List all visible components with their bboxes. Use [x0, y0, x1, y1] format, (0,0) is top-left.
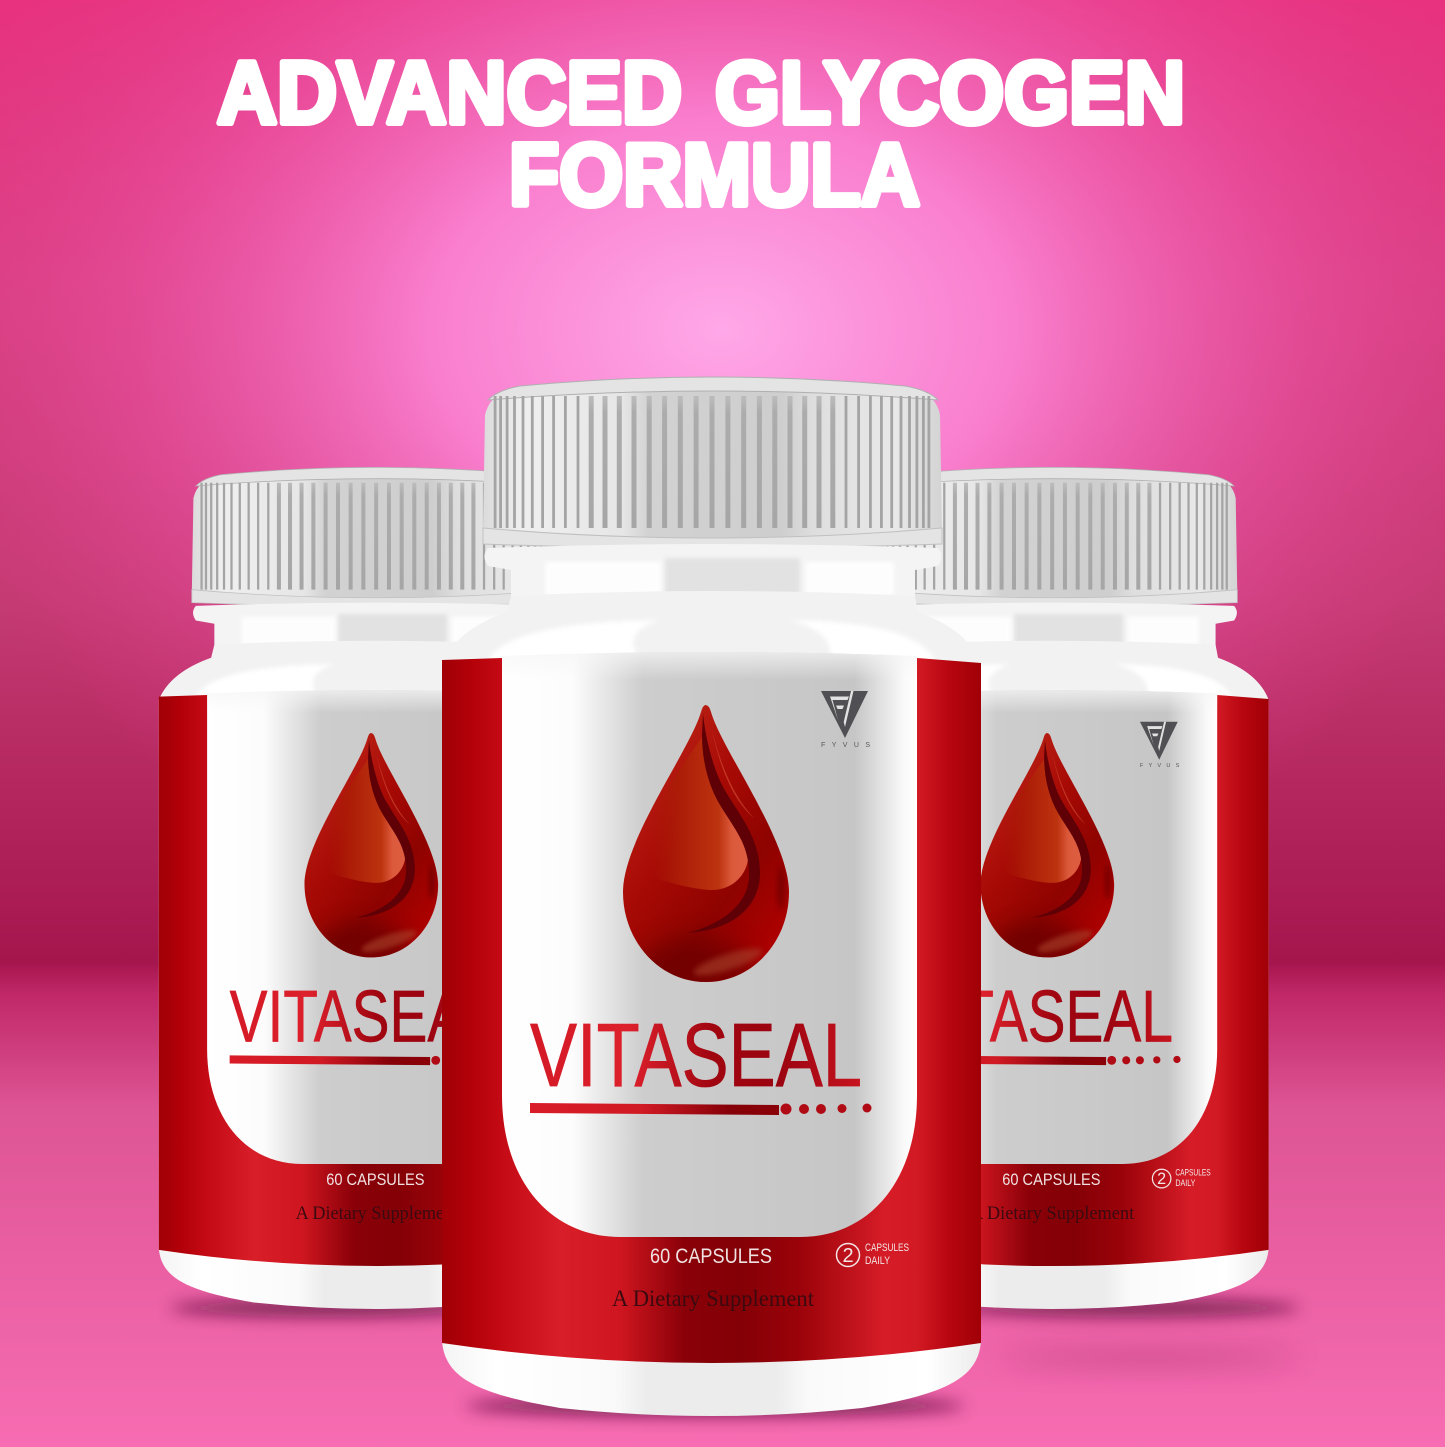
left bottle subtitle: A Dietary Supplement — [296, 1203, 459, 1224]
centre bottle — [442, 377, 981, 1416]
centre bottle capsule count: 60 CAPSULES — [650, 1245, 772, 1268]
centre bottle subtitle: A Dietary Supplement — [612, 1286, 815, 1311]
right bottle — [835, 467, 1269, 1309]
left bottle dose: 2 — [481, 1170, 490, 1188]
left bottle maker: FYVUS — [464, 763, 504, 769]
right bottle dose: DAILY — [1175, 1178, 1196, 1188]
title — [217, 43, 1185, 224]
centre bottle maker: FYVUS — [821, 742, 870, 749]
right bottle dose: CAPSULES — [1175, 1167, 1211, 1177]
centre bottle brand name: VITASEAL — [530, 1006, 862, 1106]
centre bottle dose: CAPSULES — [865, 1242, 909, 1254]
right bottle maker: FYVUS — [1140, 763, 1180, 769]
right bottle brand name: VITASEAL — [906, 976, 1173, 1058]
left bottle — [159, 467, 593, 1309]
background wall — [0, 0, 1445, 970]
left bottle capsule count: 60 CAPSULES — [326, 1170, 424, 1189]
title: ADVANCED — [217, 43, 682, 142]
right bottle dose: 2 — [1157, 1170, 1166, 1188]
title: GLYCOGEN — [715, 43, 1185, 142]
left bottle dose: DAILY — [499, 1178, 520, 1188]
title: FORMULA — [509, 125, 920, 224]
left bottle brand name: VITASEAL — [230, 976, 497, 1058]
left bottle dose — [481, 1167, 535, 1188]
centre bottle dose: 2 — [842, 1245, 854, 1267]
right bottle subtitle: A Dietary Supplement — [970, 1203, 1135, 1224]
right bottle capsule count: 60 CAPSULES — [1002, 1170, 1100, 1189]
right bottle dose — [1157, 1167, 1211, 1188]
centre bottle dose: DAILY — [865, 1255, 891, 1267]
left bottle dose: CAPSULES — [499, 1167, 535, 1177]
floor shadows — [170, 1299, 1300, 1416]
centre bottle dose — [842, 1242, 909, 1267]
background floor — [0, 965, 1445, 1447]
